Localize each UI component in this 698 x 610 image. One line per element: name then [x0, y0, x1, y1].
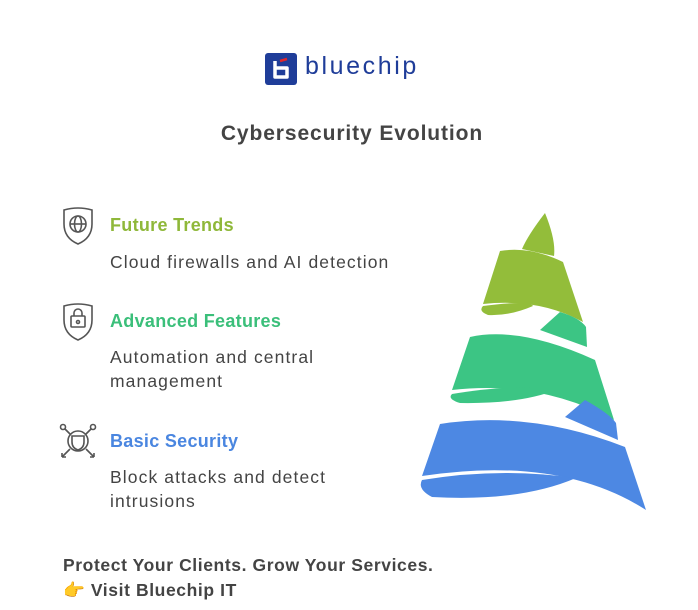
layer: advanced — [451, 312, 614, 420]
layer: basic — [421, 400, 646, 510]
text: advanced: Automation and central — [110, 347, 314, 367]
footer cta: Protect Your Clients. Grow Your Services. — [63, 555, 434, 575]
icon: shield network — [60, 424, 96, 458]
title: Cybersecurity Evolution — [221, 122, 483, 145]
heading: advanced: Advanced Features — [110, 311, 281, 331]
text: advanced: management — [110, 371, 223, 391]
text: advanced — [110, 347, 314, 391]
footer cta: 👉 Visit Bluechip IT — [63, 580, 237, 600]
footer cta — [63, 555, 434, 600]
heading: basic: Basic Security — [110, 431, 238, 451]
icon: logo mark — [265, 53, 297, 85]
heading: future trends: Future Trends — [110, 215, 234, 235]
icon: shield lock — [63, 303, 93, 341]
text: future: Cloud firewalls and AI detection — [110, 252, 389, 272]
logo text: bluechip — [305, 52, 419, 80]
text: basic: intrusions — [110, 491, 196, 511]
layer: future — [481, 213, 583, 322]
text: basic: Block attacks and detect — [110, 467, 326, 487]
logo — [265, 52, 419, 85]
icon: shield globe — [63, 207, 93, 245]
text: basic — [110, 467, 326, 511]
